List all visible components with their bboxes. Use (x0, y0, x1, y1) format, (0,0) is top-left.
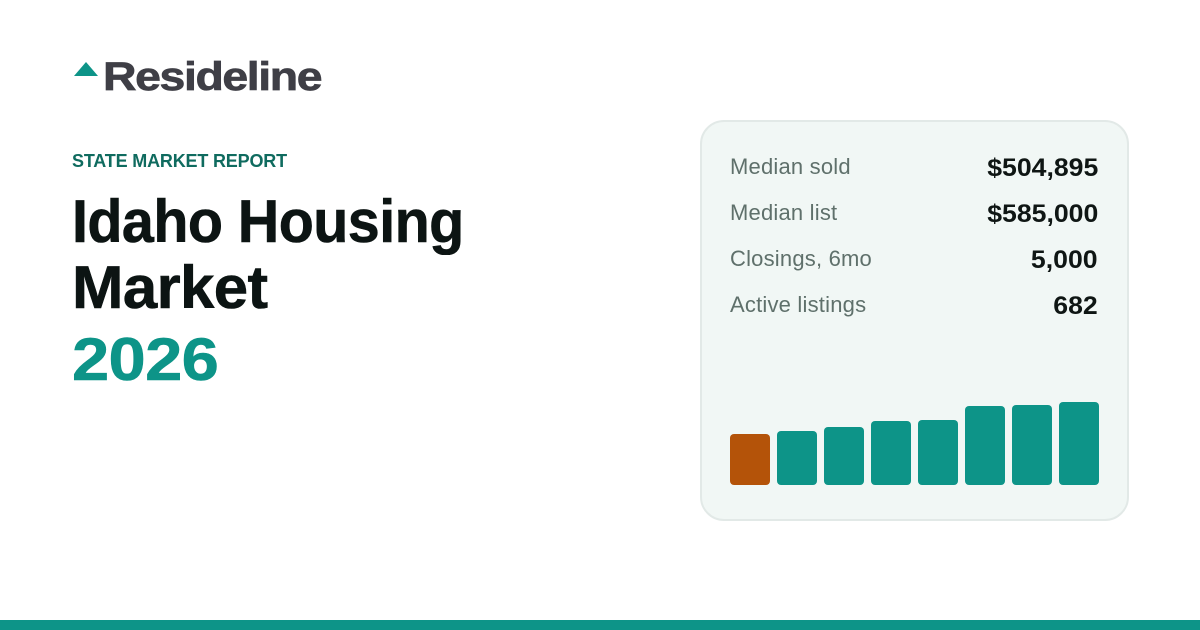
stat: closings: Closings, 6mo (730, 246, 872, 271)
stat: median sold (730, 154, 1098, 182)
stat: active listings: 682 (1054, 292, 1098, 320)
stat: closings: 5,000 (1031, 246, 1098, 274)
stat: active listings: Active listings (730, 292, 866, 317)
stat: median sold: $504,895 (987, 154, 1098, 182)
stat: median sold: Median sold (730, 154, 851, 179)
eyebrow label: STATE MARKET REPORT (72, 151, 287, 171)
title (72, 188, 464, 321)
stat: active listings (730, 292, 1098, 320)
title year: 2026 (72, 326, 218, 393)
bar chart (730, 402, 1099, 485)
logo (74, 55, 322, 99)
logo wordmark: Resideline (103, 55, 321, 99)
icon: logo triangle (74, 62, 98, 76)
footer accent bar (0, 620, 1200, 630)
stat: median list (730, 200, 1098, 228)
panel: market stats card (700, 120, 1129, 521)
stat: closings (730, 246, 1098, 274)
stat: median list: $585,000 (987, 200, 1098, 228)
stat: median list: Median list (730, 200, 837, 225)
title line 2: Market (72, 254, 268, 321)
title line 1: Idaho Housing (72, 188, 464, 255)
